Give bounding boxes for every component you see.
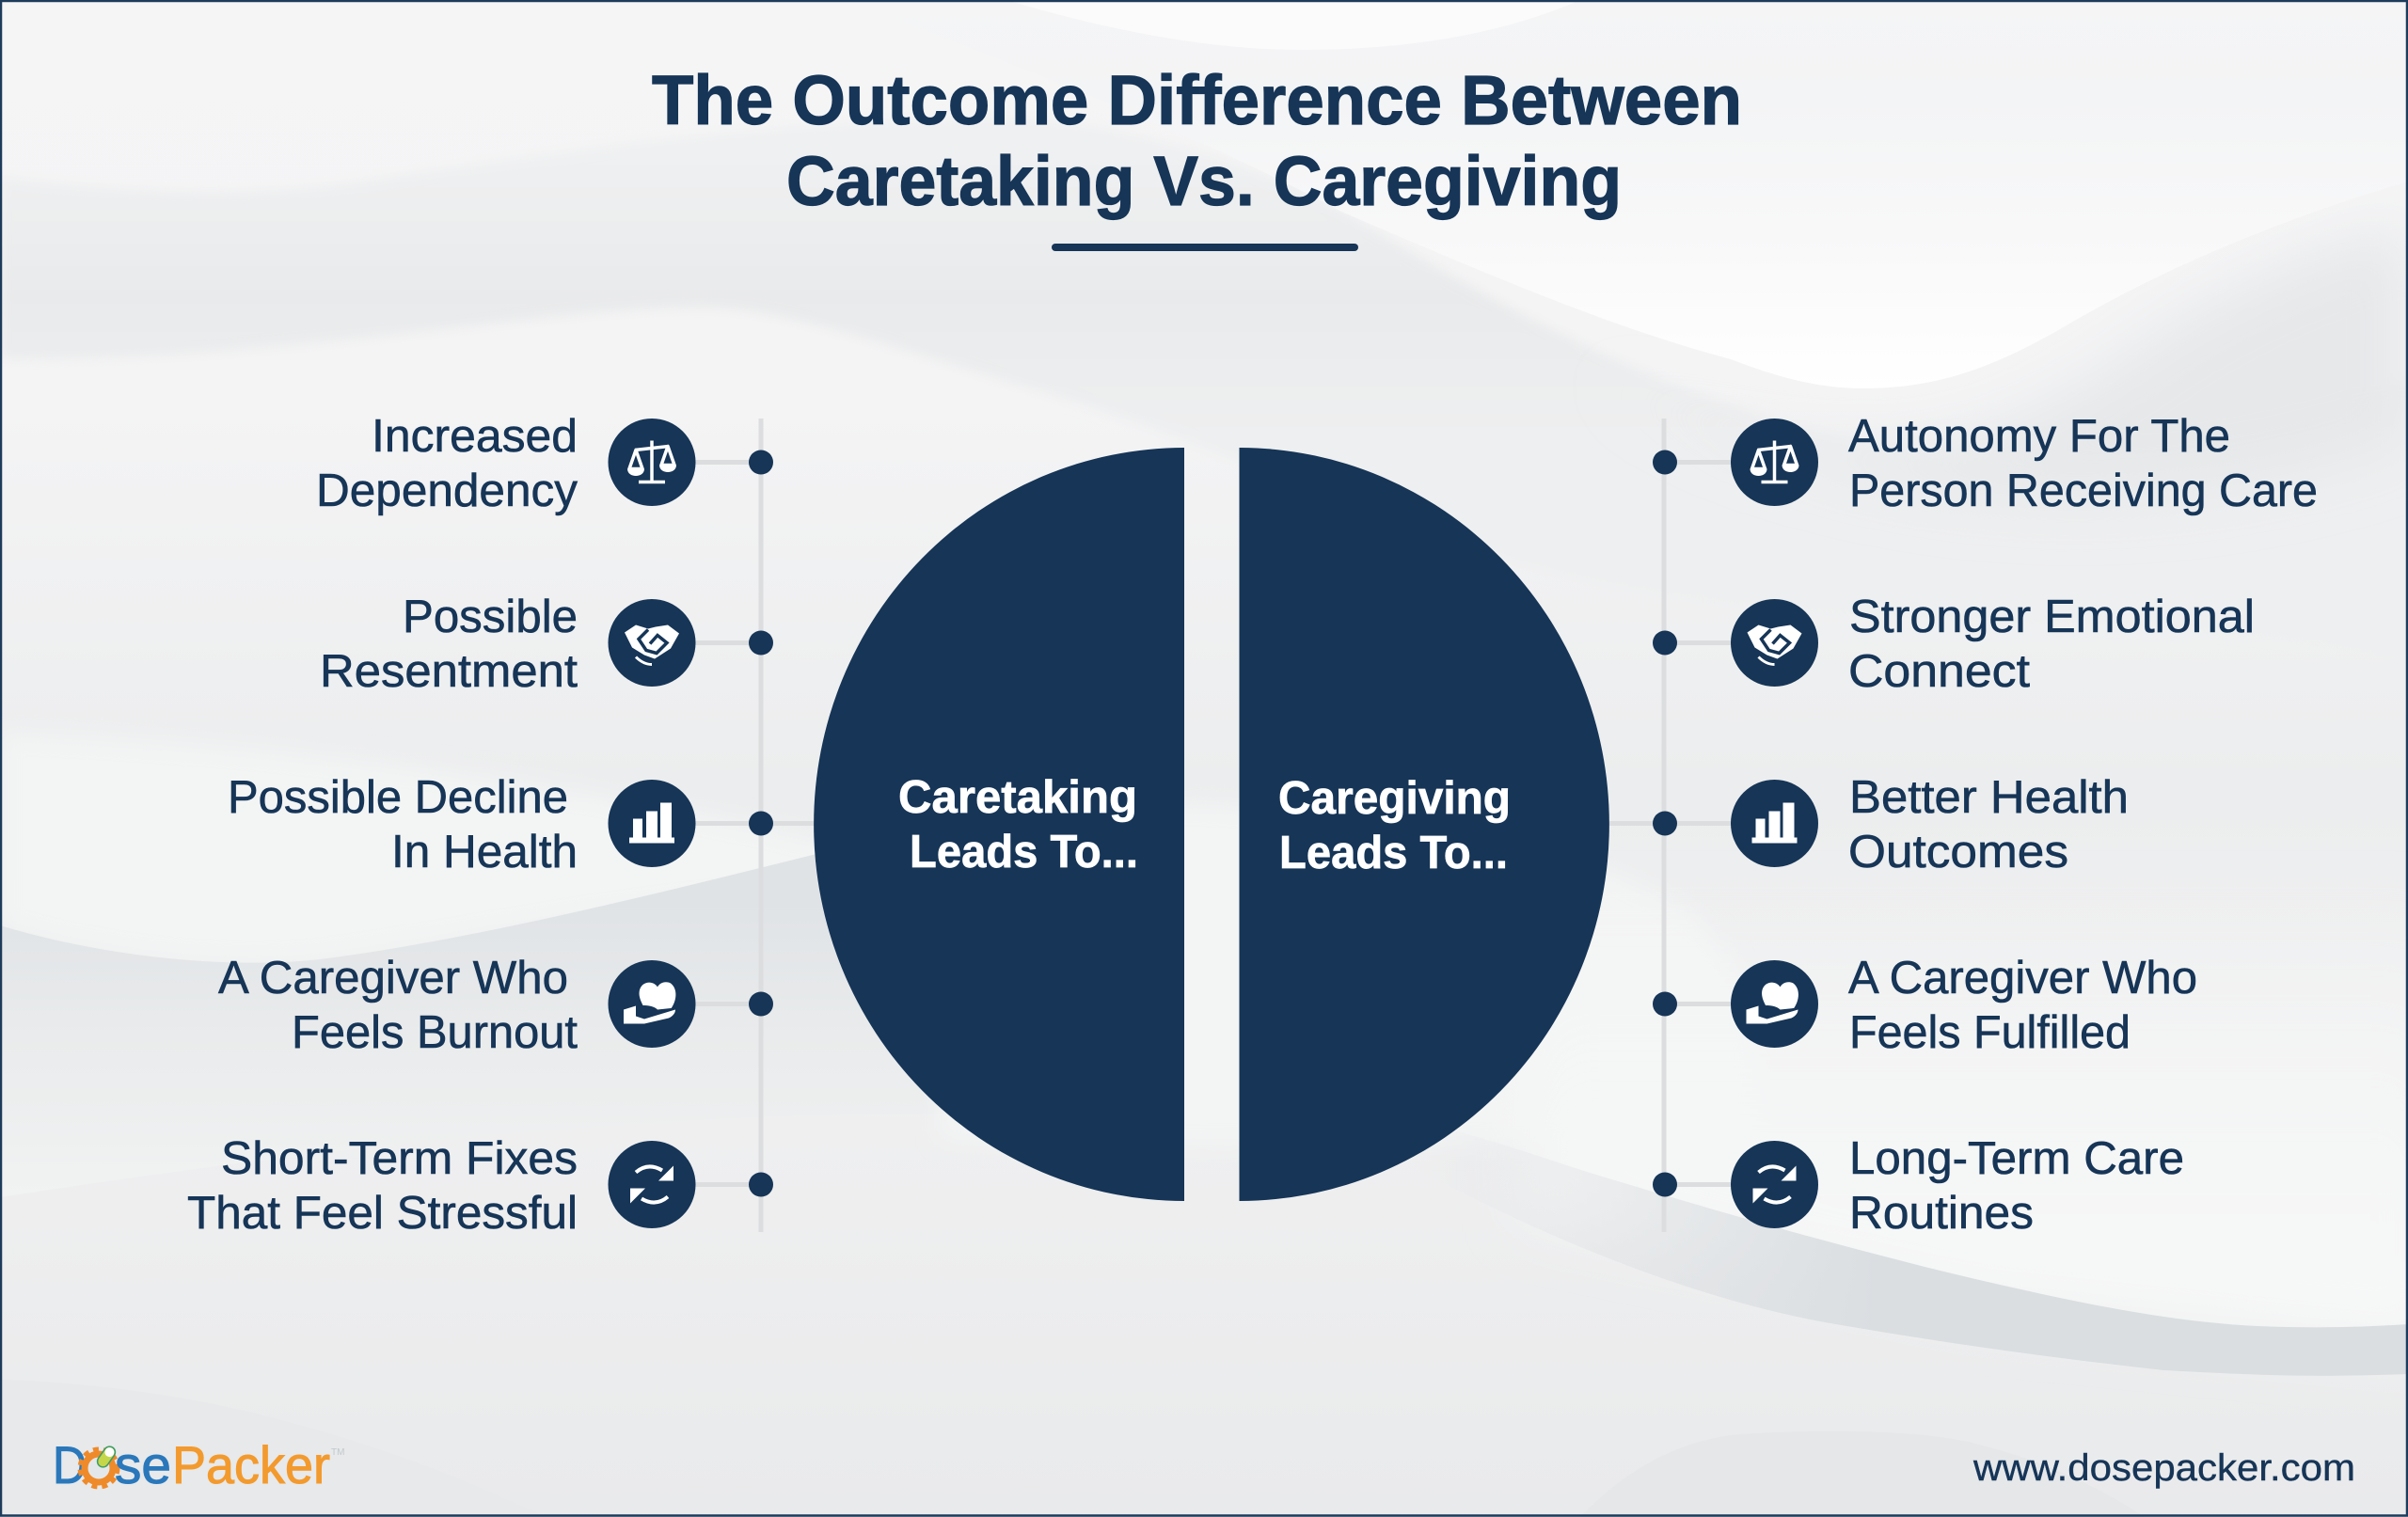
right item: stronger emotional connect: Connect [1848,646,2030,697]
right item: autonomy [1653,411,2318,516]
panel: caretaking half circle [814,448,1184,1201]
right item: better health outcomes: Better Health [1849,772,2129,823]
logo: DosePacker: se [115,1435,171,1494]
right item: caregiver who feels fulfilled [1653,953,2197,1058]
right item: stronger emotional connect [1653,592,2255,697]
right item: long-term care routines: Routines [1849,1188,2034,1239]
right item: caregiver who feels fulfilled: Feels Fulfilled [1849,1007,2131,1058]
right item: stronger emotional connect: Stronger Emotional [1849,592,2255,642]
right item: autonomy: Autonomy For The [1848,411,2230,462]
right item: better health outcomes [1653,772,2129,877]
left item: possible resentment: Possible [403,592,578,642]
left item: increased dependency: Dependency [316,466,578,516]
logo: DosePacker: D [53,1435,87,1494]
title: Caretaking Vs. Caregiving [786,142,1622,220]
left item: possible resentment: Resentment [320,646,578,697]
left item: short-term fixes: Short-Term Fixes [221,1133,578,1184]
left item: short-term fixes: That Feel Stressful [187,1188,578,1239]
connector lines: left [691,419,818,1232]
panel: caregiving half circle [1240,448,1609,1201]
left item: caregiver who feels burnout: A Caregiver Who [218,953,568,1003]
connector lines: right [1605,419,1735,1232]
left item: short-term fixes [187,1133,773,1239]
right item: long-term care routines [1653,1133,2184,1239]
left item: possible decline in health [228,772,773,877]
panel: caretaking half circle: Caretaking [898,772,1137,823]
panel: caretaking half circle: Leads To... [910,827,1138,877]
left item: possible resentment [320,592,773,697]
logo: DosePacker: Packer [172,1435,330,1494]
left item: caregiver who feels burnout: Feels Burnout [292,1007,578,1058]
title underline [1052,244,1358,251]
left item: possible decline in health: In Health [391,827,578,877]
panel: caregiving half circle: Leads To... [1279,828,1508,878]
panel: caregiving half circle: Caregiving [1278,773,1511,824]
left item: increased dependency [316,411,773,516]
left item: possible decline in health: Possible Decline [228,772,568,823]
title [652,61,1742,220]
logo: DosePacker: TM [331,1447,344,1458]
left item: caregiver who feels burnout [218,953,773,1058]
title: The Outcome Difference Between [652,61,1742,139]
right item: autonomy: Person Receiving Care [1849,466,2318,516]
logo: DosePacker [53,1435,344,1494]
right item: caregiver who feels fulfilled: A Caregiver Who [1848,953,2197,1003]
right item: better health outcomes: Outcomes [1848,827,2068,877]
website url: www.dosepacker.com [1972,1447,2355,1489]
left item: increased dependency: Increased [372,411,578,462]
right item: long-term care routines: Long-Term Care [1849,1133,2184,1184]
